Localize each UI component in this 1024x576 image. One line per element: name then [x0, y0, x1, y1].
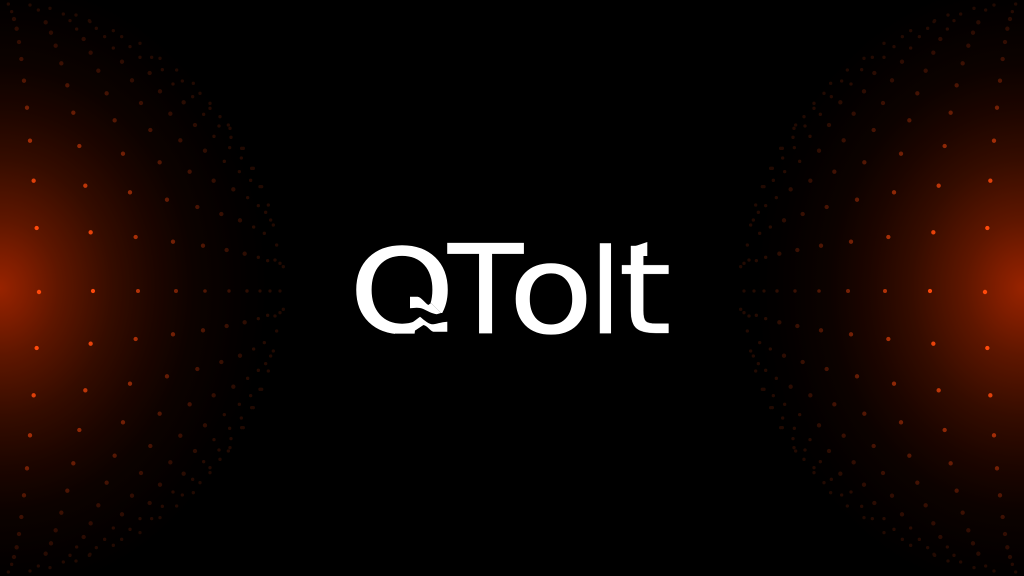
logo letter t: t: [618, 218, 672, 362]
right red glow: [754, 0, 1024, 576]
logo letter Q: Q: [350, 225, 454, 360]
logo letter l: l: [589, 223, 622, 361]
logo letter T: T: [447, 220, 524, 363]
left red glow: [0, 0, 270, 576]
logo wordmark: [350, 218, 672, 363]
logo letter o: o: [508, 218, 594, 362]
